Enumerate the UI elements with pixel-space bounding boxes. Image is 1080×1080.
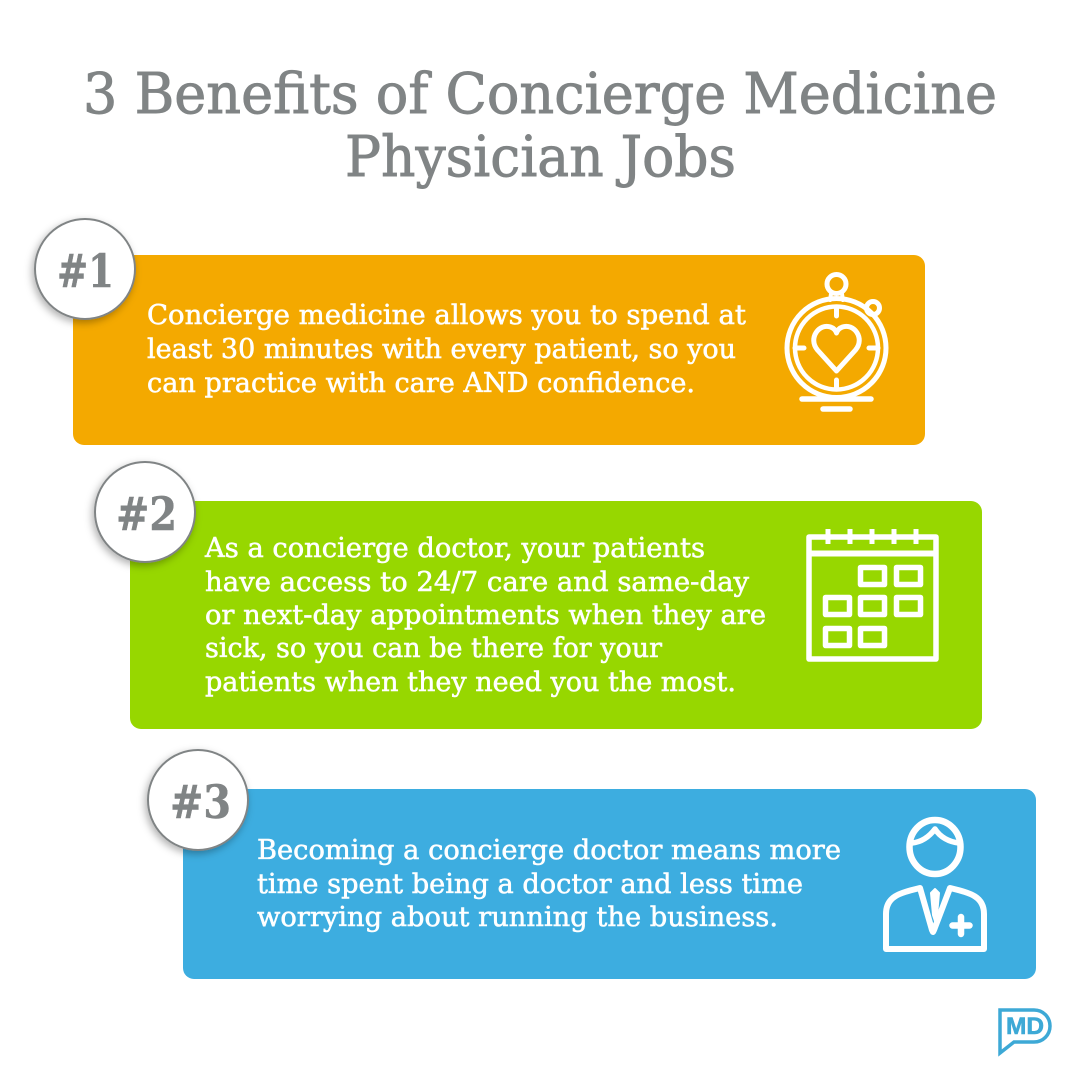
icon: calendar	[808, 529, 937, 659]
text block 1: least 30 minutes with every patient, so you	[147, 333, 736, 365]
badge: #1: #1	[57, 244, 114, 298]
panel background orange	[73, 255, 925, 445]
icon: stopwatch with heart	[787, 274, 886, 409]
panel: benefit 2	[130, 501, 982, 729]
badge: #2: #2	[116, 487, 177, 541]
text block 2: patients when they need you the most.	[205, 666, 736, 698]
panel: benefit 1	[73, 255, 925, 445]
title: Physician Jobs	[345, 125, 736, 190]
text block 2: As a concierge doctor, your patients	[204, 532, 705, 564]
badge: #1	[35, 219, 135, 319]
icon: doctor	[886, 820, 984, 949]
text block 2: have access to 24/7 care and same-day	[205, 566, 749, 598]
text block 1	[147, 299, 746, 399]
panel background green	[130, 501, 982, 729]
panel: benefit 3	[183, 789, 1036, 979]
text block 3: Becoming a concierge doctor means more	[257, 834, 841, 866]
badge: #3	[148, 750, 248, 850]
text block 2	[204, 532, 766, 698]
text block 2: or next-day appointments when they are	[205, 599, 766, 631]
logo: MD speech bubble	[1000, 1010, 1050, 1053]
text block 1: Concierge medicine allows you to spend at	[147, 299, 746, 331]
text block 3: time spent being a doctor and less time	[257, 868, 803, 900]
text block 3: worrying about running the business.	[257, 901, 778, 933]
text block 2: sick, so you can be there for your	[205, 632, 663, 664]
text block 1: can practice with care AND confidence.	[147, 367, 695, 399]
panel background blue	[183, 789, 1036, 979]
title: 3 Benefits of Concierge Medicine	[83, 62, 997, 127]
title	[83, 62, 997, 190]
badge: #3: #3	[170, 775, 231, 829]
badge: #2	[95, 462, 195, 562]
text block 3	[257, 834, 841, 933]
logo: MD speech bubble: MD	[1006, 1013, 1044, 1040]
